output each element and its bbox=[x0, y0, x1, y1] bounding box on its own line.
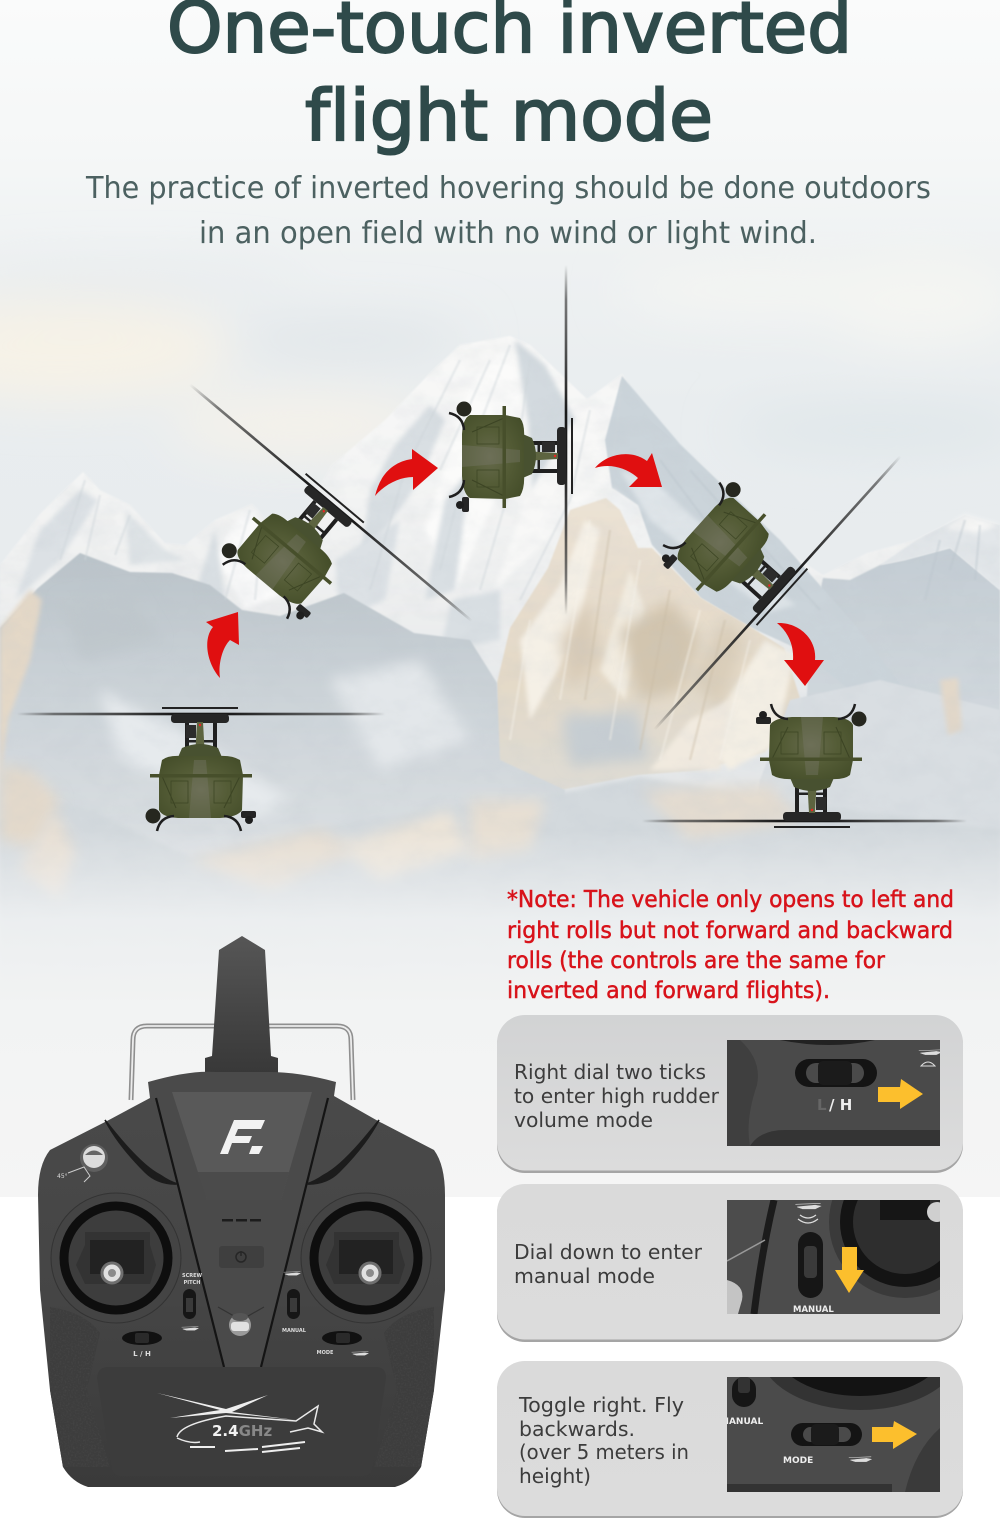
helicopter: rolled 90 degrees bbox=[449, 265, 573, 615]
facets on main snow peak bbox=[360, 405, 445, 560]
arrow: roll past sideways bbox=[595, 453, 662, 487]
rock texture overlays bbox=[180, 346, 595, 596]
switch photo: L/H toggle: / H bbox=[829, 1096, 852, 1114]
LED bbox=[229, 1313, 251, 1336]
panel text: Right dial two ticks bbox=[514, 1060, 706, 1084]
left vertical switch bbox=[182, 1273, 203, 1330]
front foot ridge bbox=[0, 777, 1000, 1000]
panel text: volume mode bbox=[514, 1108, 653, 1132]
central V panel bbox=[154, 1095, 330, 1367]
remote controller bbox=[38, 936, 445, 1487]
dark shadow patch bbox=[561, 712, 648, 765]
title bbox=[167, 0, 852, 157]
trim button upper left bbox=[57, 1144, 108, 1182]
helicopter: rolled 45 degrees bbox=[115, 379, 476, 711]
helicopter: rolled 135 degrees bbox=[567, 378, 906, 734]
left vertical switch: PITCH bbox=[184, 1280, 200, 1286]
side grips bbox=[50, 1307, 110, 1467]
switch photo: L/H toggle: L bbox=[817, 1096, 827, 1114]
panel: high rudder volume mode bbox=[497, 1015, 963, 1173]
trim button upper left: 45° bbox=[57, 1173, 68, 1180]
panel text: backwards. bbox=[519, 1417, 635, 1441]
speaker slots bbox=[222, 1219, 261, 1222]
switch photo: mode toggle bbox=[727, 1377, 940, 1492]
helicopter: level flight bbox=[17, 707, 385, 831]
right vertical switch bbox=[282, 1272, 307, 1334]
arrow: right bbox=[872, 1421, 917, 1449]
right distant mountain bbox=[790, 548, 1000, 1000]
switch photo: manual dial bbox=[727, 1200, 940, 1314]
shoulder grooves bbox=[105, 1120, 178, 1184]
note text: rolls (the controls are the same for bbox=[507, 946, 885, 974]
right stick bbox=[301, 1193, 431, 1323]
arrow: roll to sideways bbox=[375, 449, 438, 496]
2.4GHz helicopter emblem bbox=[157, 1393, 322, 1452]
front gray ridge left bbox=[0, 553, 565, 1000]
switch photo: mode toggle: MODE bbox=[783, 1456, 813, 1466]
left toggle: L / H bbox=[133, 1350, 151, 1358]
arrow: right bbox=[878, 1079, 923, 1109]
switch photo: L/H toggle bbox=[727, 1040, 941, 1146]
warm rock face bbox=[497, 498, 800, 800]
panel text bbox=[514, 1060, 720, 1132]
handle bbox=[131, 1026, 353, 1100]
panel text: to enter high rudder bbox=[514, 1084, 720, 1108]
panel text: height) bbox=[519, 1464, 591, 1488]
power button bbox=[219, 1246, 264, 1268]
2.4GHz helicopter emblem: 2.4GHz bbox=[212, 1422, 272, 1440]
display plate bbox=[97, 1367, 386, 1476]
panel: fly backwards bbox=[497, 1361, 963, 1518]
panel text: manual mode bbox=[514, 1264, 655, 1288]
subtitle: The practice of inverted hovering should be done outdoors bbox=[85, 171, 931, 206]
note text bbox=[507, 885, 954, 1004]
note text: *Note: The vehicle only opens to left and bbox=[507, 885, 954, 913]
left stick bbox=[51, 1193, 181, 1323]
note text: right rolls but not forward and backward bbox=[507, 916, 953, 944]
panel text bbox=[514, 1240, 703, 1288]
panel: manual mode bbox=[497, 1184, 963, 1342]
panel text: (over 5 meters in bbox=[519, 1440, 689, 1464]
helicopter: inverted bbox=[642, 704, 967, 828]
logo mark bbox=[220, 1120, 265, 1154]
arrow: lift into roll bbox=[206, 612, 239, 678]
background: mountain range bbox=[0, 330, 1000, 1010]
right toggle: MODE bbox=[317, 1350, 334, 1356]
body shell bbox=[38, 1072, 445, 1487]
arrow: roll to inverted bbox=[777, 623, 824, 686]
right vertical switch: MANUAL bbox=[282, 1328, 307, 1334]
panel text: Toggle right. Fly bbox=[518, 1393, 684, 1417]
switch photo: mode toggle: MANUAL bbox=[720, 1417, 763, 1427]
switch photo: manual dial: MANUAL bbox=[793, 1305, 834, 1315]
right toggle bbox=[317, 1331, 368, 1356]
shaded blue slope bbox=[605, 376, 905, 690]
ridge streaks bbox=[60, 345, 980, 760]
lower right haze bbox=[720, 680, 1000, 1000]
title: flight mode bbox=[305, 75, 713, 157]
fade to mist bbox=[0, 830, 1000, 1010]
background: sky bbox=[0, 0, 1000, 1009]
subtitle bbox=[85, 171, 931, 251]
antenna bbox=[205, 936, 278, 1074]
background: lower mist band bbox=[0, 1009, 1000, 1525]
left toggle bbox=[122, 1331, 162, 1358]
arrow: down bbox=[835, 1247, 864, 1293]
panel text bbox=[518, 1393, 689, 1488]
left vertical switch: SCREW bbox=[182, 1273, 203, 1279]
panel text: Dial down to enter bbox=[514, 1240, 703, 1264]
note text: inverted and forward flights). bbox=[507, 976, 830, 1004]
far snowy peaks bbox=[0, 336, 1000, 1000]
subtitle: in an open field with no wind or light wind. bbox=[199, 216, 817, 251]
